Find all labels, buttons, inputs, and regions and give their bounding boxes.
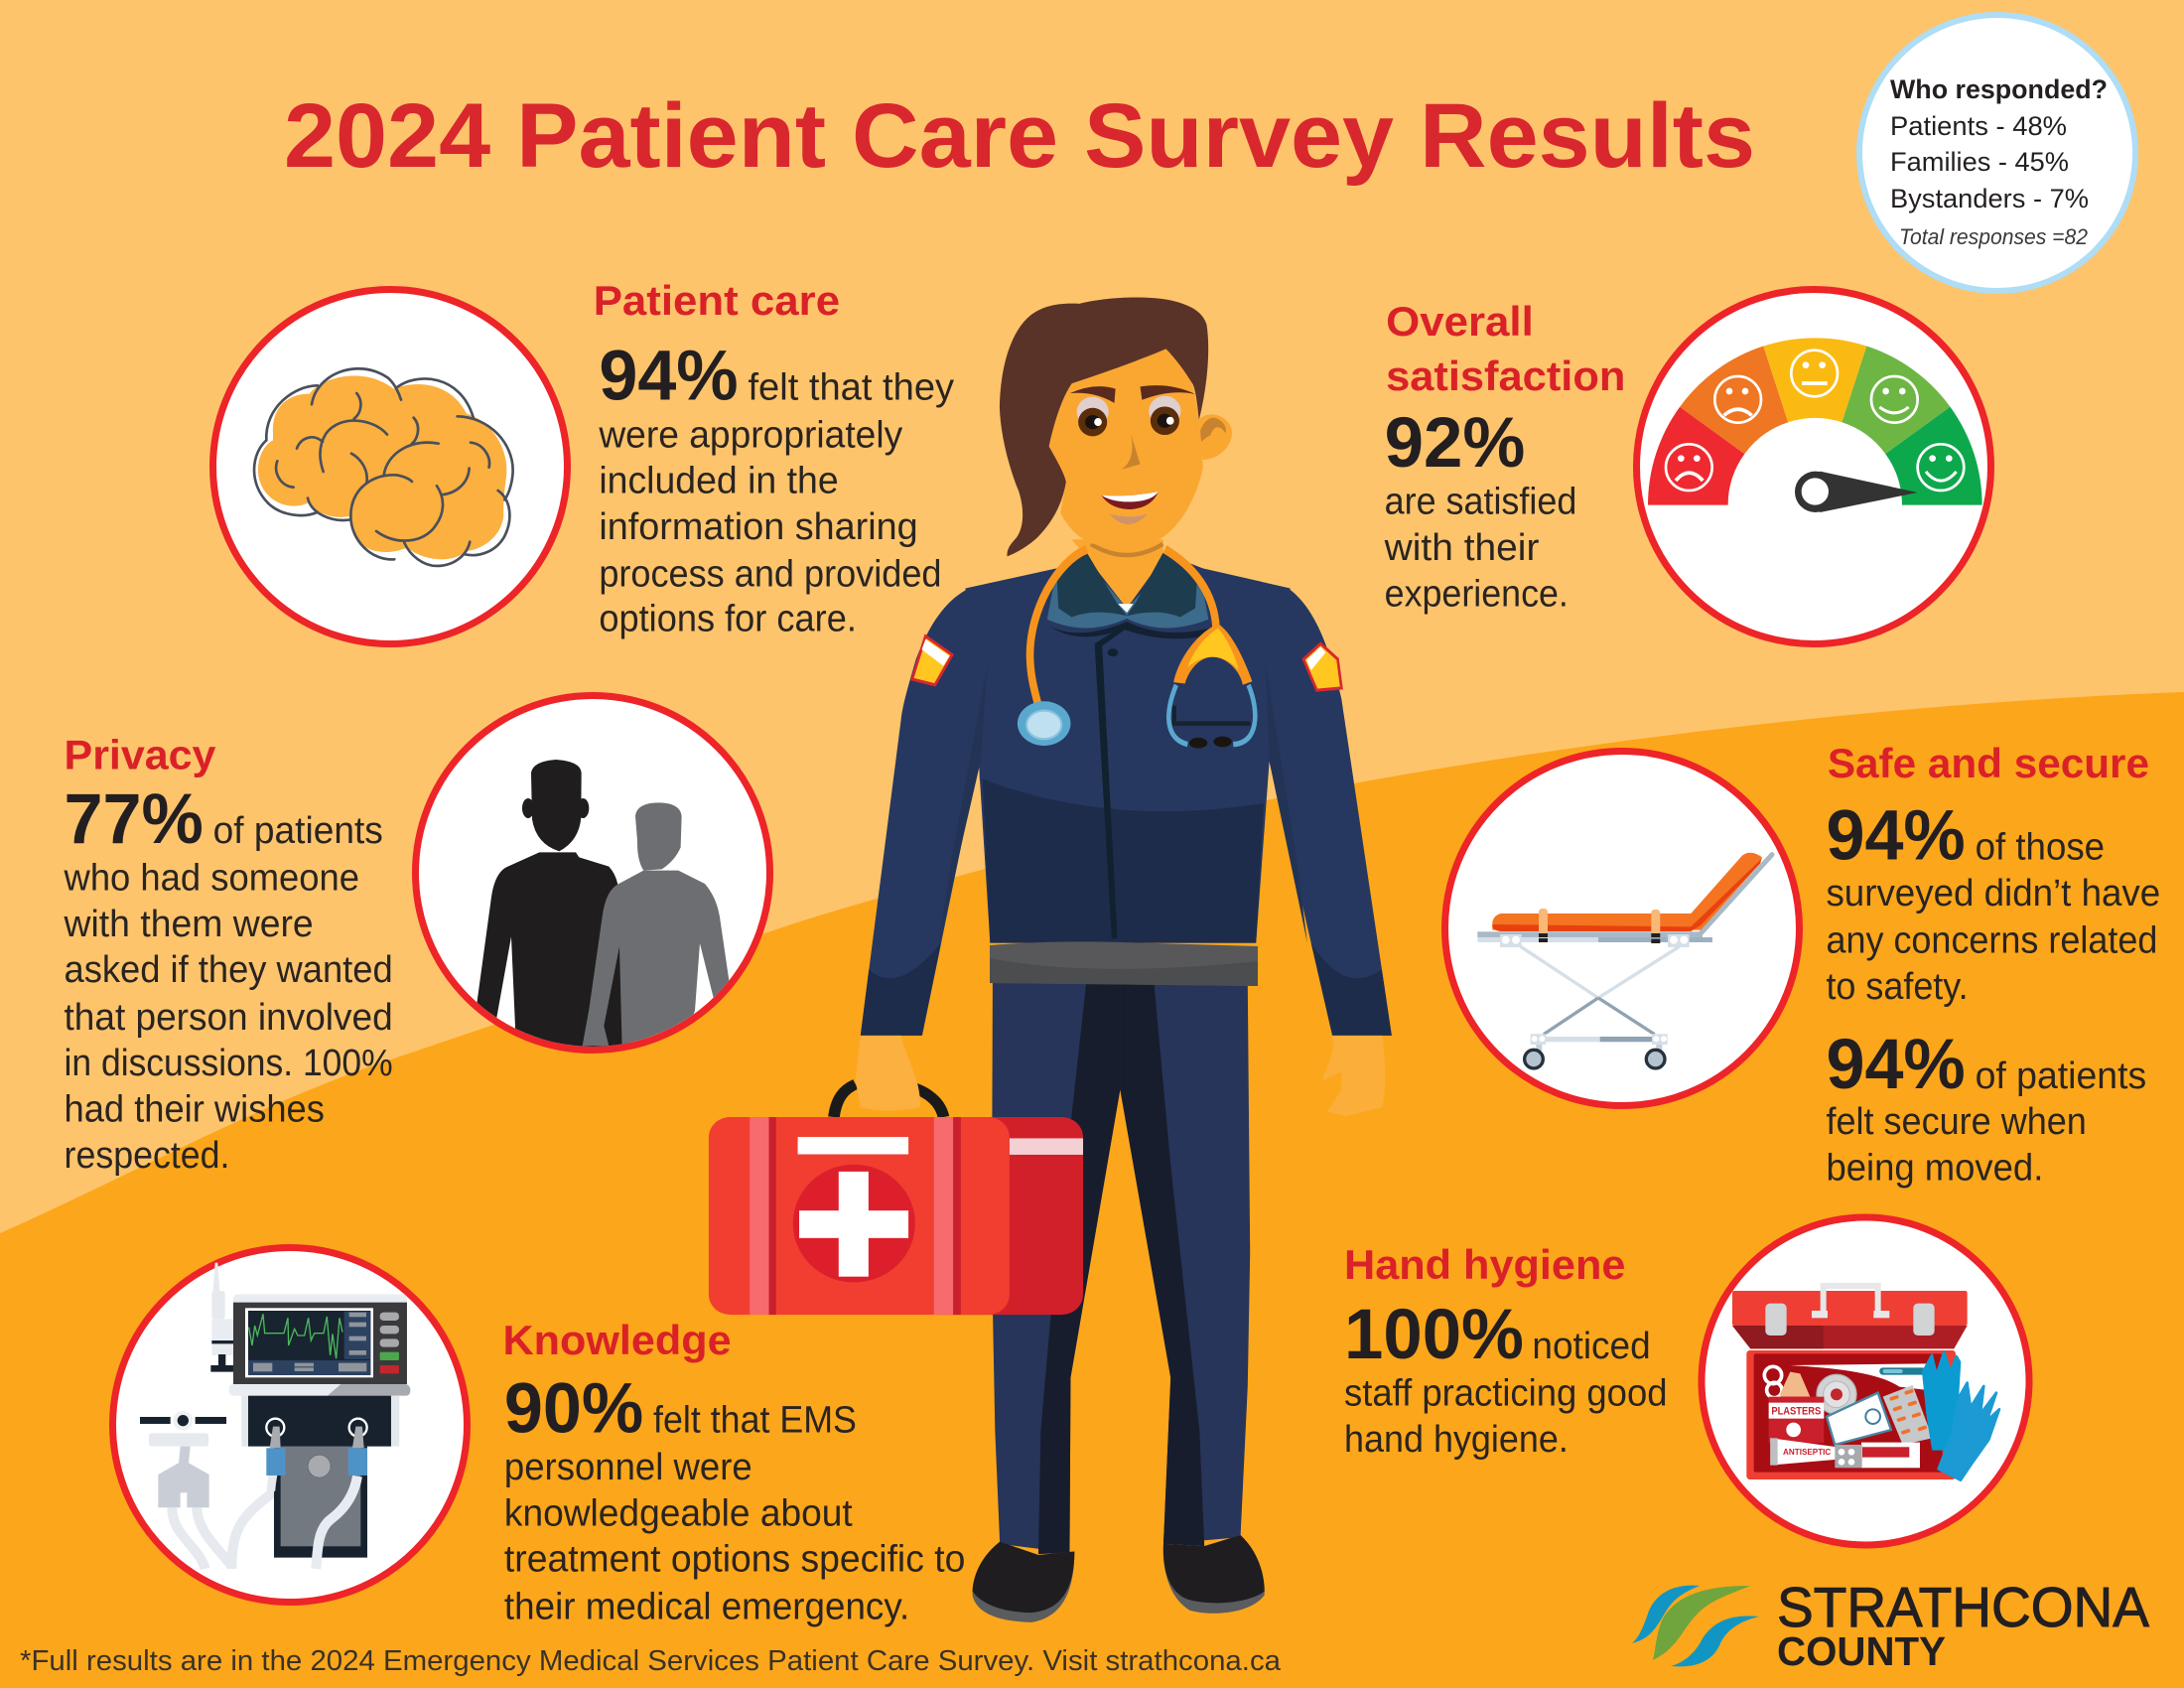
text block: safe and secure: of patients bbox=[1976, 1055, 2146, 1097]
text block: patient care: information sharing bbox=[599, 506, 918, 548]
belt bbox=[990, 941, 1258, 986]
text block: patient care: process and provided bbox=[599, 554, 941, 596]
text block: safe and secure: Safe and secure bbox=[1828, 740, 2149, 786]
background wave bbox=[0, 692, 2184, 1688]
panel: hand hygiene icon (first aid kit and gloves) bbox=[1702, 1217, 2029, 1545]
text block: safe and secure bbox=[1826, 740, 2160, 1189]
torso and uniform bbox=[861, 553, 1392, 1036]
callout: who responded: Who responded? bbox=[1890, 74, 2108, 104]
callout: who responded: Families - 45% bbox=[1890, 147, 2069, 177]
text block: hand hygiene: 100% bbox=[1344, 1295, 1524, 1374]
text block: privacy: asked if they wanted bbox=[65, 949, 393, 991]
text block: overall satisfaction: experience. bbox=[1385, 573, 1569, 615]
text block: safe and secure: 94% bbox=[1826, 1025, 1966, 1104]
text block: knowledge: 90% bbox=[504, 1368, 643, 1448]
logo: Strathcona County bbox=[1632, 1576, 2149, 1674]
callout: who responded bbox=[1859, 15, 2135, 291]
text block: privacy: respected. bbox=[65, 1135, 230, 1177]
text block: privacy: Privacy bbox=[65, 732, 216, 778]
text block: privacy: that person involved bbox=[65, 997, 393, 1039]
text block: overall satisfaction: Overall bbox=[1386, 298, 1534, 345]
text block: privacy: had their wishes bbox=[65, 1088, 325, 1130]
legs and shoes bbox=[973, 981, 1265, 1622]
text block: hand hygiene: hand hygiene. bbox=[1344, 1419, 1569, 1461]
footnote: *Full results are in the 2024 Emergency Medical Services Patient Care Survey. Visit strathcona.ca bbox=[20, 1645, 1282, 1677]
panel: privacy icon (two figures) bbox=[415, 695, 770, 1051]
text block: knowledge: knowledgeable about bbox=[504, 1492, 853, 1534]
text block: overall satisfaction bbox=[1384, 298, 1625, 615]
logo: Strathcona County: STRATHCONA bbox=[1777, 1576, 2149, 1639]
text block: patient care: were appropriately bbox=[598, 414, 902, 456]
text block: hand hygiene: Hand hygiene bbox=[1344, 1241, 1625, 1288]
text block: safe and secure: any concerns related bbox=[1826, 920, 2157, 962]
text block: overall satisfaction: are satisfied bbox=[1385, 482, 1576, 523]
text block: patient care: Patient care bbox=[594, 277, 840, 324]
text block: overall satisfaction: with their bbox=[1384, 527, 1539, 569]
panel: hand hygiene icon (first aid kit and gloves): PLASTERS bbox=[1771, 1406, 1821, 1418]
text block: knowledge: felt that EMS bbox=[653, 1399, 857, 1441]
text block: patient care: options for care. bbox=[599, 599, 857, 640]
text block: safe and secure: of those bbox=[1976, 827, 2105, 869]
text block: patient care: included in the bbox=[599, 461, 839, 502]
text block: safe and secure: surveyed didn’t have bbox=[1826, 873, 2160, 914]
panel: knowledge icon (ventilator monitor) bbox=[113, 1247, 467, 1603]
text block: knowledge: Knowledge bbox=[503, 1317, 732, 1363]
text block: safe and secure: felt secure when bbox=[1826, 1101, 2087, 1143]
text block: privacy: of patients bbox=[213, 810, 383, 852]
head, hair and face bbox=[1000, 298, 1232, 609]
collar and stethoscope bbox=[912, 549, 1341, 938]
text block: hand hygiene: staff practicing good bbox=[1344, 1373, 1668, 1415]
text block: privacy: who had someone bbox=[64, 858, 359, 900]
text block: knowledge: treatment options specific to bbox=[504, 1539, 965, 1581]
text block: safe and secure: 94% bbox=[1826, 796, 1966, 876]
text block: knowledge: personnel were bbox=[504, 1447, 752, 1488]
text block: hand hygiene: noticed bbox=[1532, 1326, 1651, 1367]
text block: knowledge: their medical emergency. bbox=[504, 1586, 909, 1627]
main figure: paramedic bbox=[709, 298, 1392, 1622]
text block: knowledge bbox=[503, 1317, 965, 1627]
text block: patient care bbox=[594, 277, 954, 640]
panel: overall satisfaction gauge bbox=[1636, 290, 1991, 643]
text block: safe and secure: to safety. bbox=[1826, 966, 1969, 1008]
panel: safe and secure icon (stretcher) bbox=[1445, 751, 1799, 1106]
text block: hand hygiene bbox=[1344, 1241, 1668, 1461]
logo: Strathcona County: COUNTY bbox=[1777, 1628, 1946, 1674]
callout: who responded: Total responses =82 bbox=[1899, 224, 2088, 249]
panel: hand hygiene icon (first aid kit and gloves): ANTISEPTIC bbox=[1783, 1447, 1831, 1457]
text block: privacy bbox=[64, 732, 393, 1177]
text block: privacy: with them were bbox=[64, 904, 314, 945]
panel: patient care icon (brain) bbox=[212, 290, 568, 643]
text block: patient care: felt that they bbox=[748, 367, 954, 409]
callout: who responded: Patients - 48% bbox=[1890, 111, 2067, 141]
callout: who responded: Bystanders - 7% bbox=[1890, 184, 2089, 213]
text block: patient care: 94% bbox=[599, 337, 739, 416]
first aid bag and hands bbox=[709, 1036, 1385, 1315]
text block: safe and secure: being moved. bbox=[1826, 1147, 2043, 1189]
title: 2024 Patient Care Survey Results bbox=[284, 85, 1755, 187]
text block: privacy: in discussions. 100% bbox=[65, 1043, 393, 1084]
text block: privacy: 77% bbox=[65, 779, 204, 859]
text block: overall satisfaction: 92% bbox=[1385, 403, 1525, 483]
text block: overall satisfaction: satisfaction bbox=[1386, 352, 1625, 399]
